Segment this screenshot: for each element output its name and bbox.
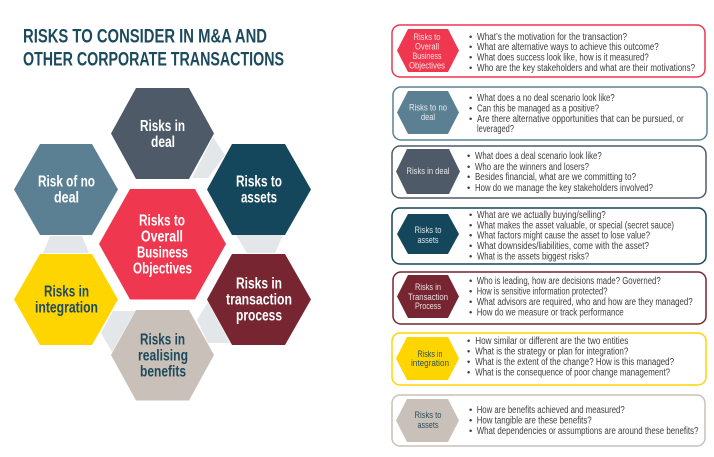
panel: risks in realising benefits: assets: [418, 420, 439, 431]
panel: risks in integration: •: [467, 346, 470, 357]
panel: risks to overall business objectives: •: [469, 41, 472, 52]
panel: risks in integration: How similar or different are the two entities: [475, 336, 628, 347]
panel: risks to no deal: deal: [421, 112, 435, 123]
hexagon: risks to overall business objectives: Business: [137, 244, 188, 261]
panel: risks in integration: •: [467, 335, 470, 346]
hexagon: risk of no deal: [14, 144, 118, 235]
panel: risks to no deal: Risks to no: [409, 102, 447, 114]
panel: risks in transaction process: •: [469, 307, 472, 318]
panel: risks in deal: Risks in deal: [406, 166, 450, 177]
panel: risks to assets: assets: [418, 235, 439, 246]
panel: risks in integration: What is the strategy or plan for integration?: [475, 347, 629, 358]
panel: risks to assets: What downsides/liabilities, come with the asset?: [477, 241, 649, 252]
panel: risks in deal: •: [467, 150, 470, 161]
hexagon: risks to assets: [207, 144, 311, 235]
panel: risks in transaction process: How do we measure or track performance: [477, 308, 624, 319]
hexagon: risks to overall business objectives: [99, 189, 226, 300]
hexagon: risks to overall business objectives: Risks to: [139, 212, 185, 229]
panel: risks to no deal: Can this be managed as a positive?: [477, 104, 599, 114]
panel: risks to assets: [392, 208, 706, 264]
panel: risks in transaction process: How is sensitive information protected?: [477, 287, 608, 298]
panel: risks to overall business objectives: What are alternative ways to achieve this outcome?: [477, 42, 659, 53]
panel: risks to assets: •: [469, 251, 472, 262]
panel: risks to no deal: What does a no deal scenario look like?: [477, 93, 615, 104]
hexagon: risks in integration: integration: [35, 299, 98, 316]
panel: risks in deal: Besides financial, what are we committing to?: [475, 172, 636, 183]
panel: risks to assets: Risks to: [414, 225, 442, 236]
hexagon: risks to overall business objectives: Objectives: [133, 260, 192, 277]
panel: risks in realising benefits: How are benefits achieved and measured?: [477, 405, 625, 416]
panel: risks in integration: Risks in: [418, 349, 442, 360]
panel: risks to overall business objectives: Overall: [415, 42, 439, 52]
panel: risks in transaction process: •: [469, 275, 472, 286]
panel: risks to assets: •: [469, 230, 472, 241]
panel: risks to assets: •: [469, 240, 472, 251]
panel: risks in realising benefits: •: [469, 404, 472, 415]
panel: risks in transaction process: Risks in: [415, 282, 441, 293]
panel: risks in deal: Who are the winners and losers?: [475, 162, 589, 173]
hexagon: risk of no deal: Risk of no: [38, 174, 95, 191]
panel: risks to assets: •: [469, 209, 472, 220]
hexagon: risks in transaction process: transaction: [226, 291, 292, 308]
hexagon: risks in transaction process: process: [236, 307, 282, 324]
panel: risks in transaction process: [393, 272, 706, 324]
panel: risks in deal: How do we manage the key stakeholders involved?: [475, 183, 653, 194]
panel: risks to no deal: [393, 87, 707, 140]
panel: risks to overall business objectives: •: [469, 31, 472, 42]
panel: risks in deal: [392, 146, 706, 198]
panel: risks to no deal: •: [469, 113, 472, 124]
hexagon: risks to assets: Risks to: [236, 174, 282, 191]
hexagon: risk of no deal: deal: [54, 190, 79, 207]
panel: risks to overall business objectives: •: [469, 62, 472, 73]
panel: risks in deal: •: [467, 161, 470, 172]
panel: risks in deal: •: [467, 171, 470, 182]
panel: risks in transaction process: Process: [415, 301, 441, 312]
panel: risks in integration: •: [467, 366, 470, 377]
hexagon: risks in transaction process: Risks in: [236, 275, 282, 292]
panel: risks in integration: [392, 333, 706, 385]
panel: risks to assets: What are we actually buying/selling?: [477, 210, 606, 221]
panel: risks in transaction process: Who is leading, how are decisions made? Governed?: [477, 276, 661, 287]
hexagon: risks in transaction process: [207, 254, 311, 345]
hexagon: risks to assets: assets: [241, 190, 277, 207]
panel: risks to overall business objectives: What does success look like, how is it measured?: [477, 52, 649, 64]
panel: risks in transaction process: •: [469, 296, 472, 307]
panel: risks in deal: What does a deal scenario look like?: [475, 151, 602, 162]
panel: risks to assets: What is the assets biggest risks?: [477, 252, 589, 263]
panel: risks to no deal: •: [469, 102, 472, 114]
panel: risks to overall business objectives: Objectives: [409, 60, 445, 72]
panel: risks in realising benefits: Risks to: [414, 410, 442, 421]
title: [23, 27, 284, 71]
title: OTHER CORPORATE TRANSACTIONS: [23, 50, 284, 71]
panel: risks to assets: What factors might cause the asset to lose value?: [477, 231, 650, 242]
hexagon: risks in deal: Risks in: [140, 118, 185, 135]
hexagon: risks in realising benefits: benefits: [140, 363, 186, 380]
hexagon: risks in integration: [14, 254, 118, 345]
panel: risks to no deal: leveraged?: [477, 124, 514, 135]
hexagon diagram: [14, 88, 311, 400]
panel: risks to overall business objectives: [392, 25, 705, 77]
panel: risks to overall business objectives: Business: [412, 51, 442, 62]
panel: risks in transaction process: •: [469, 286, 472, 297]
panel: risks in transaction process: Transaction: [408, 292, 448, 303]
panel: risks in realising benefits: •: [469, 415, 472, 426]
panel: risks to overall business objectives: •: [469, 52, 472, 62]
panel: risks to overall business objectives: Risks to: [414, 32, 440, 43]
panel: risks in realising benefits: •: [469, 425, 472, 436]
panel: risks in deal: •: [467, 182, 470, 193]
panel: risks to overall business objectives: What’s the motivation for the transaction?: [477, 32, 627, 43]
panel: risks in integration: integration: [411, 358, 449, 369]
hexagon: risks in deal: [111, 88, 214, 179]
title: RISKS TO CONSIDER IN M&A AND: [23, 27, 267, 48]
panel: risks to assets: •: [469, 220, 472, 231]
panel: risks in integration: •: [467, 356, 470, 367]
hexagon: risks in realising benefits: Risks in: [140, 331, 185, 348]
hexagon: risks in realising benefits: [111, 310, 214, 400]
panel: risks in realising benefits: [392, 395, 705, 446]
panel: risks to no deal: •: [469, 92, 472, 103]
hexagon: risks in deal: deal: [151, 134, 175, 151]
hexagon: risks in integration: Risks in: [44, 283, 89, 300]
panel: risks in realising benefits: How tangible are these benefits?: [477, 416, 592, 427]
hexagon: risks to overall business objectives: Overall: [141, 228, 183, 245]
hexagon: risks in realising benefits: realising: [138, 347, 188, 364]
